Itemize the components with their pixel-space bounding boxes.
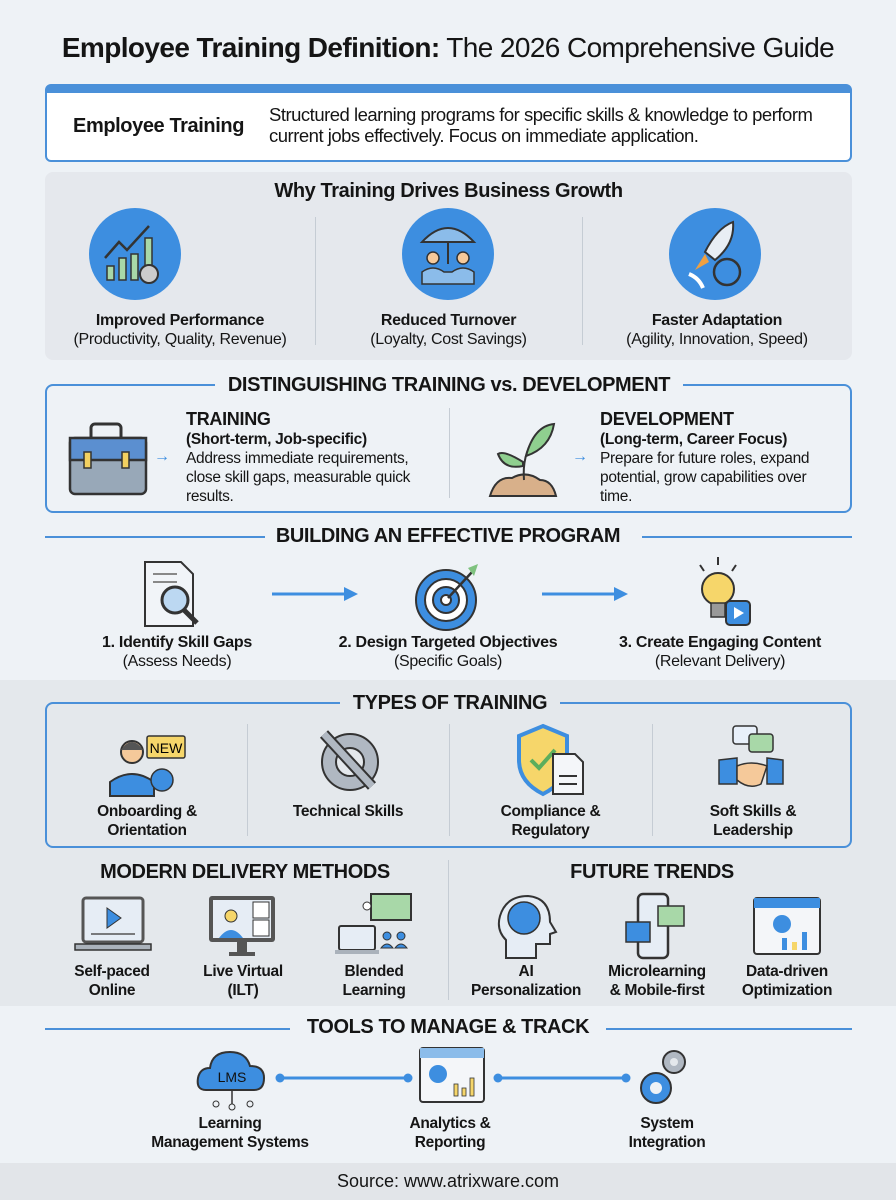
- panel: types of training: [45, 702, 852, 848]
- label: data-driven: Optimization: [742, 982, 832, 999]
- icon: dashboard: [752, 896, 822, 956]
- label: improved performance: [73, 312, 286, 348]
- text: training: [186, 409, 410, 505]
- text: development: (Long-term, Career Focus): [600, 431, 787, 448]
- label: step 2: (Specific Goals): [394, 653, 502, 670]
- label: reduced turnover: [370, 312, 527, 348]
- label: AI personalization: [471, 963, 581, 999]
- footer: Source: www.atrixware.com: [337, 1171, 559, 1191]
- label: system integration: Integration: [629, 1134, 705, 1151]
- icon: target: [415, 564, 478, 631]
- gray band: [0, 680, 896, 1006]
- text: development: potential, grow capabilities over: [600, 469, 806, 486]
- arrow: [272, 587, 358, 601]
- label: onboarding: [97, 803, 197, 839]
- label: AI personalization: AI: [519, 963, 533, 980]
- section: building program: [45, 525, 852, 670]
- definition text: [269, 104, 812, 146]
- icon: plant: [488, 422, 558, 497]
- definition text: current jobs effectively. Focus on immediate application.: [269, 125, 698, 146]
- label: blended: Blended: [344, 963, 404, 980]
- icon: AI head: [498, 895, 558, 959]
- label: analytics: Reporting: [415, 1134, 485, 1151]
- text: training: TRAINING: [186, 409, 271, 429]
- arrow: [542, 587, 628, 601]
- panel: training vs development: [45, 384, 852, 513]
- icon: handshake: [718, 725, 784, 787]
- heading: TOOLS TO MANAGE & TRACK: [307, 1016, 589, 1038]
- label: live virtual: Live Virtual: [203, 963, 283, 980]
- label: step 2: [339, 634, 557, 670]
- text: development: DEVELOPMENT: [600, 409, 734, 429]
- label: microlearning: & Mobile-first: [610, 982, 704, 999]
- icon: monitor video call: [209, 896, 275, 956]
- icon: document magnifier: [144, 561, 199, 627]
- label: blended: [342, 963, 406, 999]
- icon: rocket: [669, 208, 761, 300]
- label: onboarding: Orientation: [107, 822, 187, 839]
- label: LMS: [130, 1114, 330, 1152]
- label: system integration: [597, 1114, 737, 1152]
- label: microlearning: Microlearning: [608, 963, 706, 980]
- icon: umbrella: [402, 208, 494, 300]
- text: training: close skill gaps, measurable quick: [186, 469, 410, 486]
- heading: FUTURE TRENDS: [570, 861, 734, 883]
- definition text: Structured learning programs for specific skills & knowledge to perform: [269, 104, 812, 125]
- label: live virtual: [203, 963, 283, 999]
- label: step 1: 1. Identify Skill Gaps: [102, 634, 252, 651]
- label: reduced turnover: Reduced Turnover: [381, 312, 516, 329]
- icon: mobile micro: [625, 892, 685, 960]
- text: development: [600, 409, 809, 505]
- label: faster adaptation: (Agility, Innovation, Speed): [626, 331, 808, 348]
- arrow: →: [572, 448, 588, 465]
- label: technical skills: Technical Skills: [293, 803, 403, 820]
- title: Employee Training Definition: The 2026 Comprehensive Guide: [62, 32, 834, 63]
- label: step 1: [102, 634, 252, 670]
- label: analytics: [380, 1114, 520, 1152]
- label: compliance: Compliance &: [501, 803, 600, 820]
- icon: wrench gear: [320, 730, 379, 791]
- label: LMS: Management Systems: [151, 1134, 309, 1151]
- icon: growth chart: [89, 208, 181, 300]
- label: data-driven: Data-driven: [746, 963, 828, 980]
- label: live virtual: (ILT): [228, 982, 258, 999]
- footer: [0, 1163, 896, 1200]
- arrow: →: [154, 448, 170, 465]
- icon: lightbulb: [699, 557, 751, 626]
- label: improved performance: Improved Performance: [96, 312, 264, 329]
- label: faster adaptation: [626, 312, 808, 348]
- label: soft skills: Soft Skills &: [710, 803, 796, 820]
- label: self-paced: Self-paced: [74, 963, 150, 980]
- label: compliance: [501, 803, 600, 839]
- label: soft skills: Leadership: [713, 822, 793, 839]
- connector lines: [276, 1072, 636, 1084]
- icon: LMS cloud: LMS: [218, 1069, 246, 1085]
- icon: LMS cloud: [196, 1046, 268, 1116]
- label: system integration: System: [640, 1115, 694, 1132]
- label: step 3: [619, 634, 822, 670]
- label: self-paced: [74, 963, 150, 999]
- text: training: Address immediate requirements,: [186, 450, 408, 467]
- panel: future trends: [471, 861, 832, 999]
- label: onboarding: Onboarding &: [97, 803, 197, 820]
- text: development: time.: [600, 488, 632, 505]
- label: step 3: (Relevant Delivery): [655, 653, 785, 670]
- label: microlearning: [608, 963, 706, 999]
- definition term: Employee Training: [73, 115, 244, 137]
- icon: blended: [335, 893, 412, 954]
- heading: MODERN DELIVERY METHODS: [100, 861, 390, 883]
- icon: analytics: [418, 1046, 486, 1104]
- icon: laptop video: [74, 896, 152, 951]
- label: blended: Learning: [342, 982, 406, 999]
- label: step 3: 3. Create Engaging Content: [619, 634, 821, 651]
- icon: new employee: [109, 735, 186, 797]
- label: self-paced: Online: [89, 982, 135, 999]
- icon: shield document: [517, 724, 584, 796]
- label: faster adaptation: Faster Adaptation: [652, 312, 782, 329]
- label: analytics: Analytics &: [409, 1115, 491, 1132]
- text: development: Prepare for future roles, expand: [600, 450, 809, 467]
- heading: DISTINGUISHING TRAINING vs. DEVELOPMENT: [228, 374, 670, 396]
- panel: definition: [45, 84, 852, 162]
- panel: modern delivery methods: [74, 861, 412, 999]
- icon: briefcase: [68, 422, 148, 496]
- heading: BUILDING AN EFFECTIVE PROGRAM: [276, 525, 620, 547]
- label: improved performance: (Productivity, Quality, Revenue): [73, 331, 286, 348]
- label: soft skills: [710, 803, 796, 839]
- label: AI personalization: Personalization: [471, 982, 581, 999]
- panel: why training drives growth: [45, 172, 852, 360]
- label: reduced turnover: (Loyalty, Cost Savings): [370, 331, 527, 348]
- label: step 1: (Assess Needs): [123, 653, 231, 670]
- heading: Why Training Drives Business Growth: [274, 180, 623, 202]
- label: LMS: Learning: [198, 1115, 262, 1132]
- label: step 2: 2. Design Targeted Objectives: [339, 634, 557, 651]
- text: training: (Short-term, Job-specific): [186, 431, 367, 448]
- heading: TYPES OF TRAINING: [353, 692, 547, 714]
- label: data-driven: [732, 962, 842, 1000]
- icon: gears: [634, 1046, 694, 1108]
- section: tools: [0, 1016, 896, 1156]
- icon: new employee: NEW: [150, 740, 183, 756]
- text: training: results.: [186, 488, 234, 505]
- label: compliance: Regulatory: [512, 822, 589, 839]
